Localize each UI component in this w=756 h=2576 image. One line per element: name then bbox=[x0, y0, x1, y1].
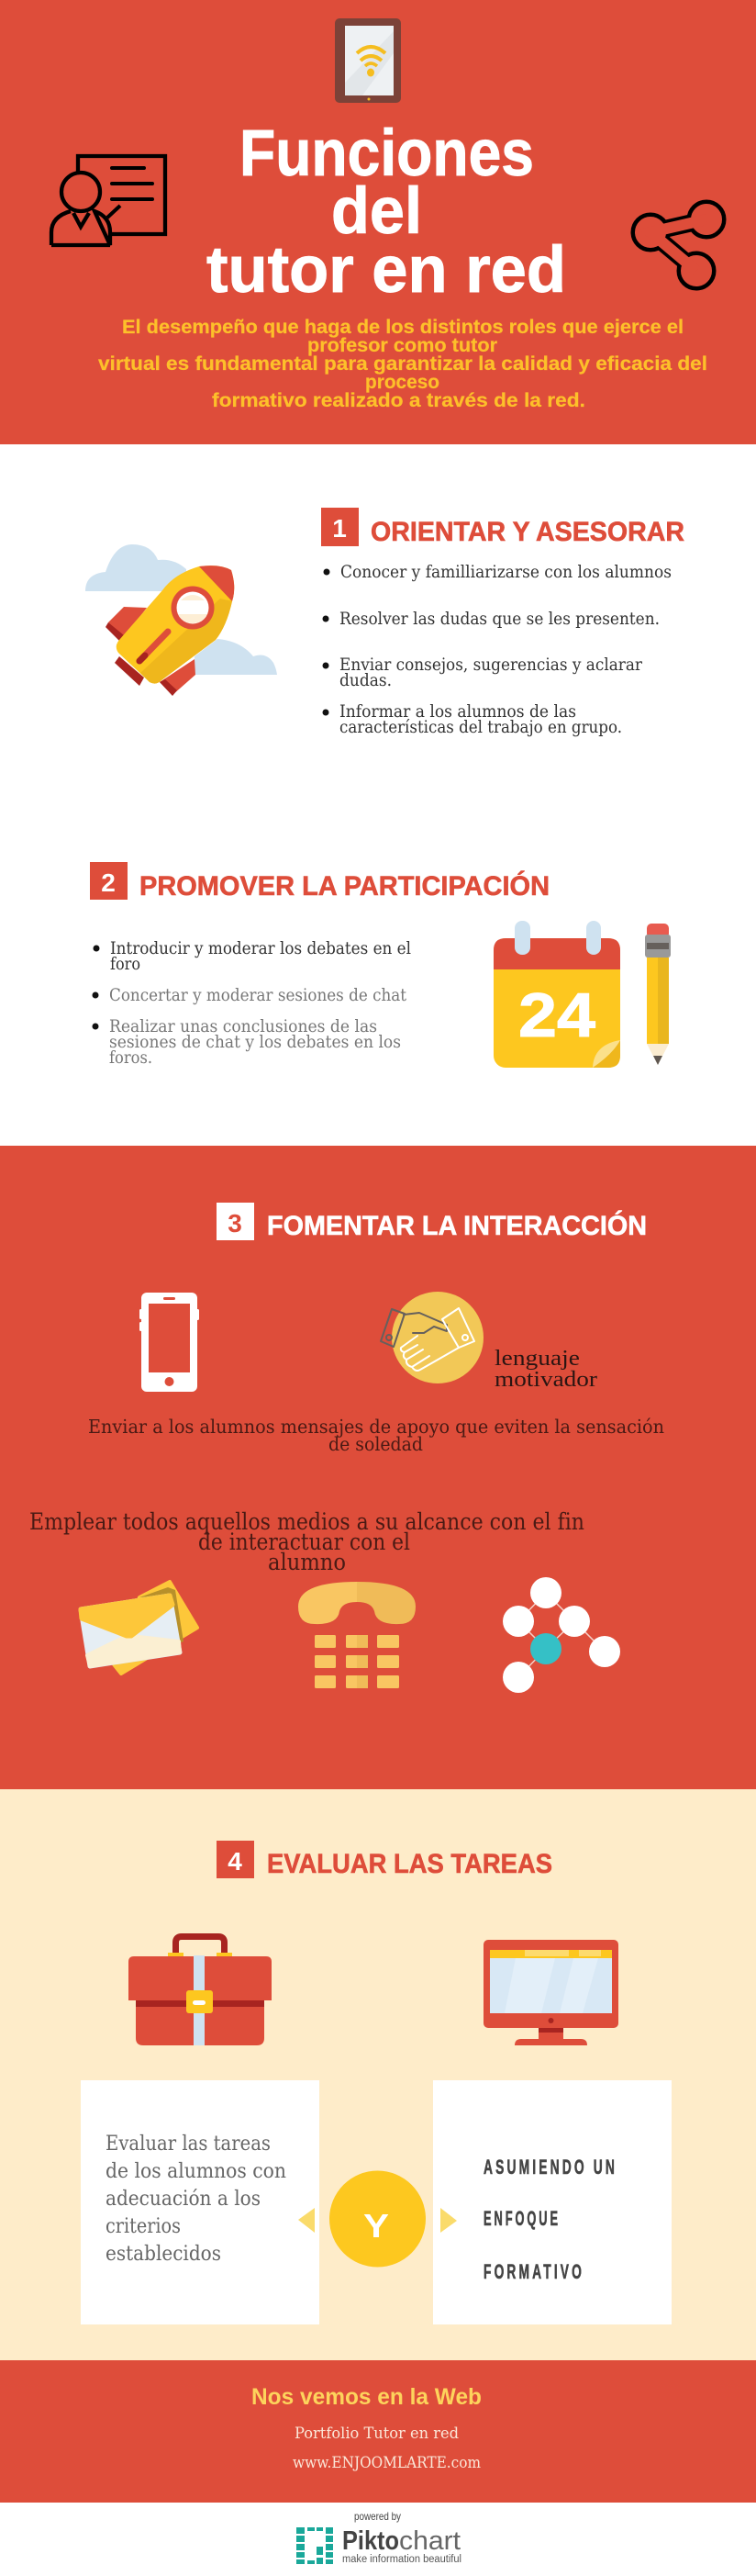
section 4 heading: 4 bbox=[228, 1847, 242, 1876]
section 1 bullet list: Enviar consejos, sugerencias y aclarar bbox=[339, 655, 642, 675]
text: mensajes de apoyo: de soledad bbox=[328, 1433, 423, 1455]
piktochart logo: powered by bbox=[354, 2510, 401, 2523]
intro text bbox=[98, 317, 707, 411]
footer links: Portfolio Tutor en red bbox=[295, 2425, 459, 2443]
card: asumiendo un enfoque formativo: ENFOQUE bbox=[484, 2207, 561, 2230]
icon: handshake bbox=[381, 1292, 484, 1383]
section 2 bullet list: foro bbox=[110, 955, 140, 974]
title: Funciones bbox=[239, 118, 534, 190]
text: mensajes de apoyo: Enviar a los alumnos mensajes de apoyo que eviten la sensación bbox=[88, 1416, 664, 1438]
icon: briefcase bbox=[128, 1937, 272, 2045]
piktochart logo: make information beautiful bbox=[342, 2554, 461, 2565]
intro text: proceso bbox=[365, 372, 439, 393]
panel: section 2 promover la participacion bbox=[90, 862, 671, 1068]
text: emplear medios bbox=[29, 1508, 584, 1575]
title: tutor en red bbox=[206, 234, 566, 307]
icon: teacher at board bbox=[51, 156, 165, 245]
card: evaluar las tareas bbox=[81, 2080, 319, 2324]
section 3 heading: 3 bbox=[228, 1209, 242, 1238]
lenguaje motivador label bbox=[495, 1347, 597, 1392]
section 1 bullet list: Resolver las dudas que se les presenten. bbox=[339, 610, 660, 629]
footer links bbox=[293, 2425, 481, 2472]
section 2 bullet list: foros. bbox=[109, 1048, 152, 1068]
lenguaje motivador label: motivador bbox=[495, 1368, 597, 1392]
intro text: El desempeño que haga de los distintos roles que ejerce el bbox=[122, 317, 684, 338]
intro text: formativo realizado a través de la red. bbox=[212, 390, 585, 411]
section 2 bullet list bbox=[92, 939, 411, 1068]
section 2 bullet list: Realizar unas conclusiones de las bbox=[109, 1017, 377, 1036]
section 1 bullet list: características del trabajo en grupo. bbox=[339, 718, 622, 737]
section 3 heading: FOMENTAR LA INTERACCIÓN bbox=[267, 1210, 647, 1241]
section 2 heading: PROMOVER LA PARTICIPACIÓN bbox=[139, 870, 550, 902]
icon: calendar bbox=[494, 921, 620, 1068]
icon: calendar: 24 bbox=[518, 980, 595, 1050]
text: emplear medios: alumno bbox=[268, 1549, 346, 1575]
section 1 heading bbox=[321, 508, 684, 547]
section 2 heading bbox=[90, 862, 550, 902]
section 1 bullet list: Conocer y familliarizarse con los alumnos bbox=[340, 563, 672, 582]
section 3 heading bbox=[217, 1203, 647, 1241]
panel: footer bbox=[0, 2360, 756, 2503]
card: asumiendo un enfoque formativo: ASUMIENDO UN bbox=[484, 2156, 617, 2178]
section 2 bullet list: Concertar y moderar sesiones de chat bbox=[109, 986, 407, 1005]
card: asumiendo un enfoque formativo bbox=[433, 2080, 672, 2324]
intro text: profesor como tutor bbox=[307, 335, 497, 356]
icon: envelopes bbox=[81, 1582, 197, 1674]
connector: Y circle with arrows: Y bbox=[363, 2207, 389, 2245]
section 1 bullet list: Informar a los alumnos de las bbox=[339, 702, 576, 722]
panel: section 1 orientar y asesorar bbox=[85, 508, 684, 737]
section 4 heading: EVALUAR LAS TAREAS bbox=[267, 1849, 552, 1879]
icon: pencil bbox=[645, 924, 671, 1065]
card: evaluar las tareas: Evaluar las tareas bbox=[106, 2132, 271, 2156]
icon: telephone bbox=[298, 1582, 416, 1688]
card: asumiendo un enfoque formativo: FORMATIVO bbox=[484, 2260, 584, 2283]
section 2 bullet list: sesiones de chat y los debates en los bbox=[109, 1033, 401, 1052]
icon: smartphone bbox=[139, 1293, 199, 1392]
section 1 bullet list: dudas. bbox=[339, 671, 392, 690]
card: evaluar las tareas: establecidos bbox=[106, 2242, 221, 2266]
card: evaluar las tareas: de los alumnos con bbox=[106, 2159, 286, 2183]
piktochart logo: Pikto bbox=[342, 2526, 399, 2556]
panel: section 4 evaluar las tareas bbox=[0, 1789, 756, 2360]
piktochart logo: chart bbox=[399, 2526, 461, 2556]
title: del bbox=[331, 175, 422, 248]
icon: tablet with wifi bbox=[335, 18, 401, 103]
lenguaje motivador label: lenguaje bbox=[495, 1347, 580, 1371]
piktochart logo bbox=[296, 2510, 461, 2565]
card: evaluar las tareas: criterios bbox=[106, 2214, 181, 2238]
text: emplear medios: de interactuar con el bbox=[198, 1529, 410, 1555]
icon: network nodes bbox=[503, 1577, 620, 1693]
icon: share network bbox=[631, 200, 726, 290]
connector: Y circle with arrows bbox=[298, 2170, 457, 2268]
section 4 heading bbox=[217, 1841, 552, 1879]
footer links: www.ENJOOMLARTE.com bbox=[293, 2454, 481, 2472]
footer heading: Nos vemos en la Web bbox=[251, 2384, 482, 2410]
title bbox=[206, 118, 566, 307]
text: emplear medios: Emplear todos aquellos medios a su alcance con el fin bbox=[29, 1508, 584, 1535]
section 2 heading: 2 bbox=[101, 868, 116, 897]
card: evaluar las tareas: adecuación a los bbox=[106, 2187, 261, 2211]
section 1 heading: ORIENTAR Y ASESORAR bbox=[371, 517, 684, 547]
text: mensajes de apoyo bbox=[88, 1416, 664, 1455]
icon: monitor bbox=[484, 1940, 618, 2045]
section 1 heading: 1 bbox=[332, 514, 347, 543]
icon: piktochart tile mark bbox=[296, 2527, 333, 2564]
icon: rocket and clouds bbox=[85, 544, 277, 696]
panel: header bbox=[0, 0, 756, 444]
intro text: virtual es fundamental para garantizar la calidad y eficacia del bbox=[98, 353, 707, 375]
panel: section 3 fomentar la interaccion bbox=[0, 1146, 756, 1789]
section 1 bullet list bbox=[323, 563, 672, 737]
section 2 bullet list: Introducir y moderar los debates en el bbox=[110, 939, 411, 958]
